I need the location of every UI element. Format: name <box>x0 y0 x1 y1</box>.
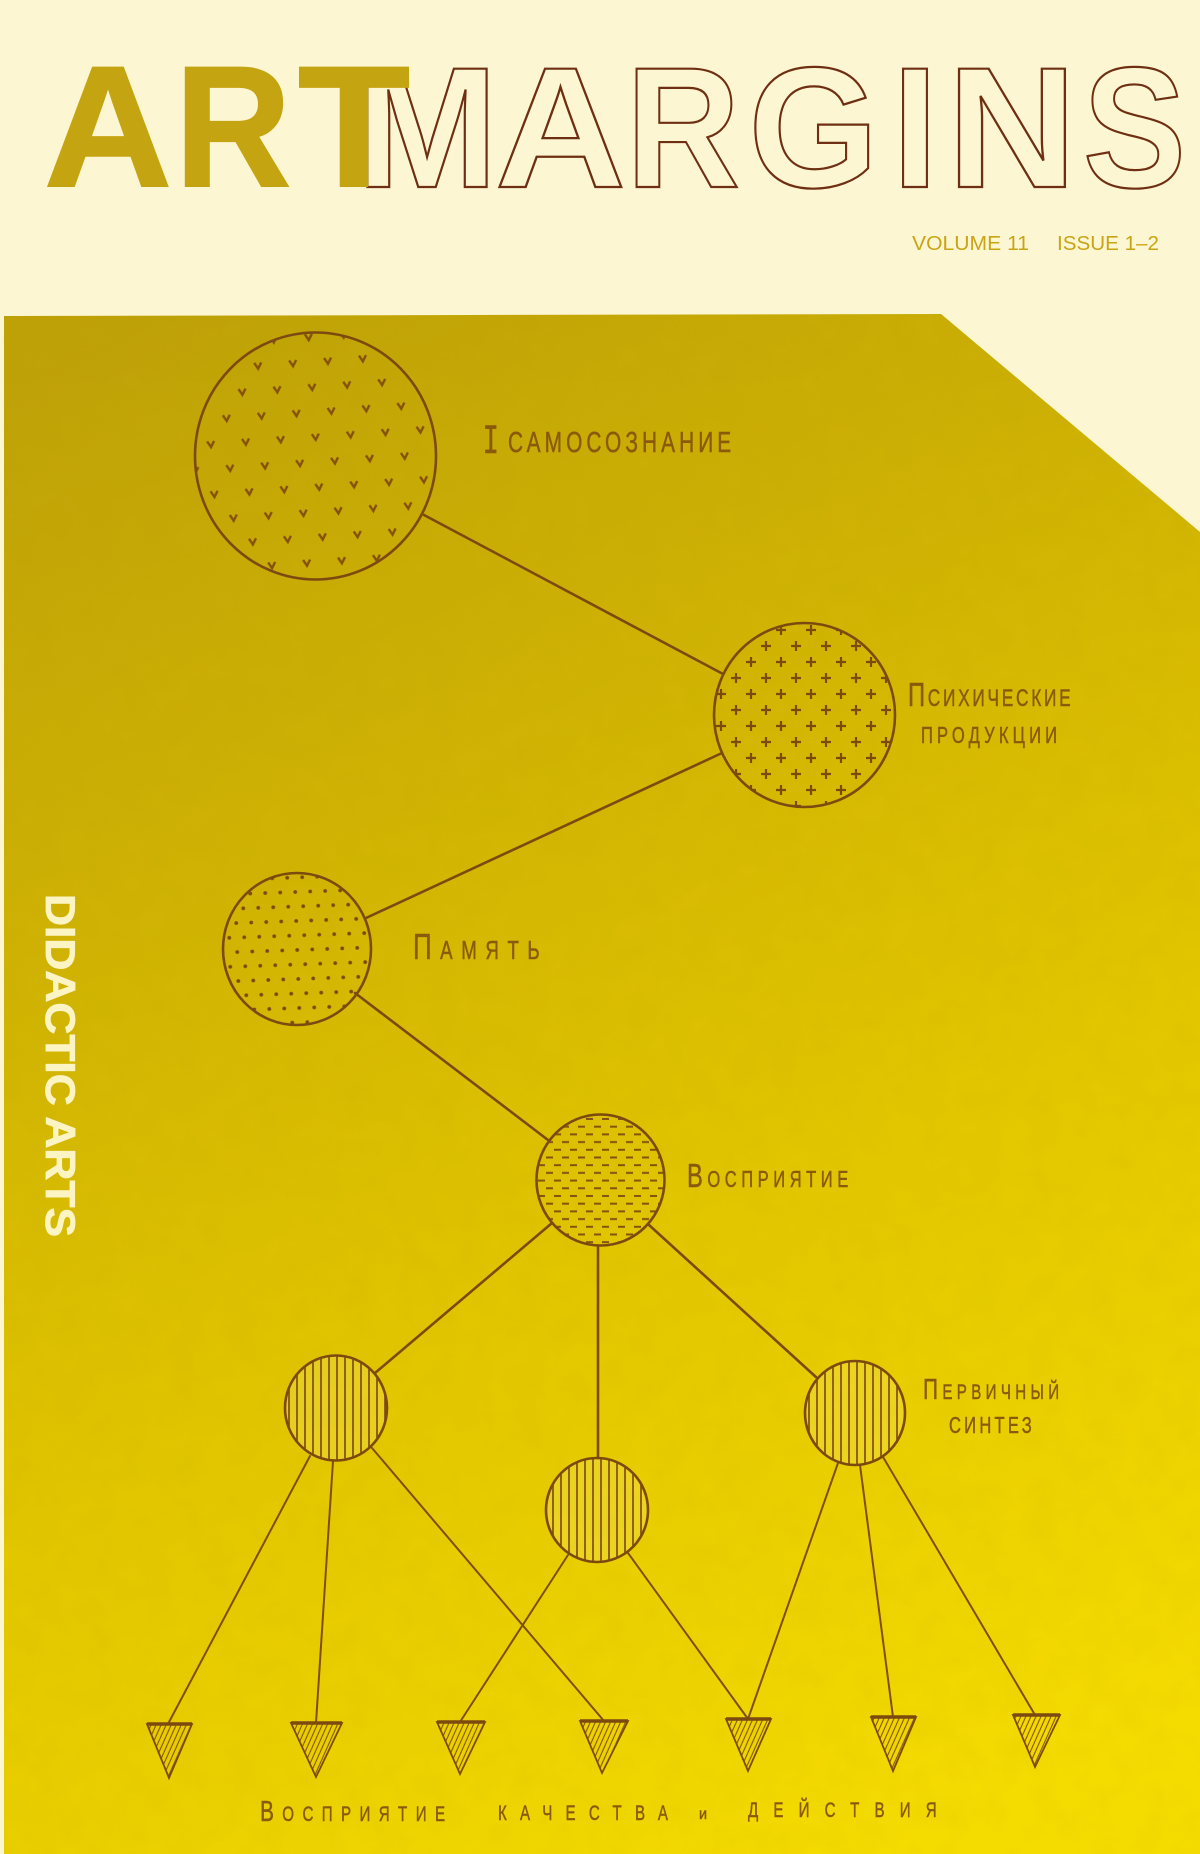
circle: perception with dashes <box>536 1114 664 1246</box>
three synthesis circles with vertical hatching <box>285 1356 905 1562</box>
solid word ART <box>44 31 410 223</box>
solid word ART: T <box>298 31 410 223</box>
circle: psychic products with plus marks <box>714 623 895 807</box>
label: первичный синтез: ПЕРВИЧНЫЙ <box>923 1374 1059 1406</box>
title: ARTMARGINS wordmark <box>44 31 1186 224</box>
issue information <box>912 233 1159 255</box>
outlined word MARGINS: S <box>1083 32 1186 224</box>
bottom caption: восприятие качества и действия <box>260 1796 937 1828</box>
label: восприятие: ВОСПРИЯТИЕ <box>687 1158 848 1195</box>
bottom caption: восприятие качества и действия: В ОСПРИЯТИЕ <box>260 1796 445 1828</box>
outlined word MARGINS: R <box>626 32 740 224</box>
outlined word MARGINS: M <box>356 32 498 224</box>
issue information: VOLUME 11 <box>912 233 1029 255</box>
circle: self-consciousness with check marks <box>195 332 436 580</box>
bottom caption: восприятие качества и действия: ДЕЙСТВИЯ <box>748 1797 937 1822</box>
label: психические продукции: ПСИХИЧЕСКИЕ <box>908 677 1071 714</box>
label: психические продукции <box>908 677 1071 749</box>
lines from synthesis circles to triangles <box>168 1448 1035 1724</box>
issue information: ISSUE 1–2 <box>1057 233 1159 255</box>
label: I самосознание: САМОСОЗНАНИЕ <box>508 427 731 459</box>
label: I самосознание <box>483 419 731 466</box>
outlined word MARGINS <box>356 32 1186 224</box>
label: психические продукции: ПРОДУКЦИИ <box>921 723 1057 749</box>
hatched triangles row <box>147 1715 1060 1778</box>
label: первичный синтез: СИНТЕЗ <box>949 1413 1032 1439</box>
solid word ART: A <box>44 31 172 223</box>
circle: memory with dots <box>223 873 371 1025</box>
spine title: DIDACTIC ARTS: DIDACTIC ARTS <box>37 894 84 1237</box>
connecting lines of the diagram <box>355 515 817 1458</box>
outlined word MARGINS: A <box>495 32 626 224</box>
solid word ART: R <box>175 31 291 223</box>
outlined word MARGINS: G <box>748 32 878 224</box>
label: I самосознание: I <box>483 419 499 466</box>
label: память: П АМЯТЬ <box>413 927 540 967</box>
label: первичный синтез <box>923 1374 1059 1439</box>
bottom caption: восприятие качества и действия: КАЧЕСТВА <box>498 1800 669 1825</box>
outlined word MARGINS: I <box>892 32 938 224</box>
outlined word MARGINS: N <box>947 32 1077 224</box>
bottom caption: восприятие качества и действия: и <box>699 1805 707 1823</box>
